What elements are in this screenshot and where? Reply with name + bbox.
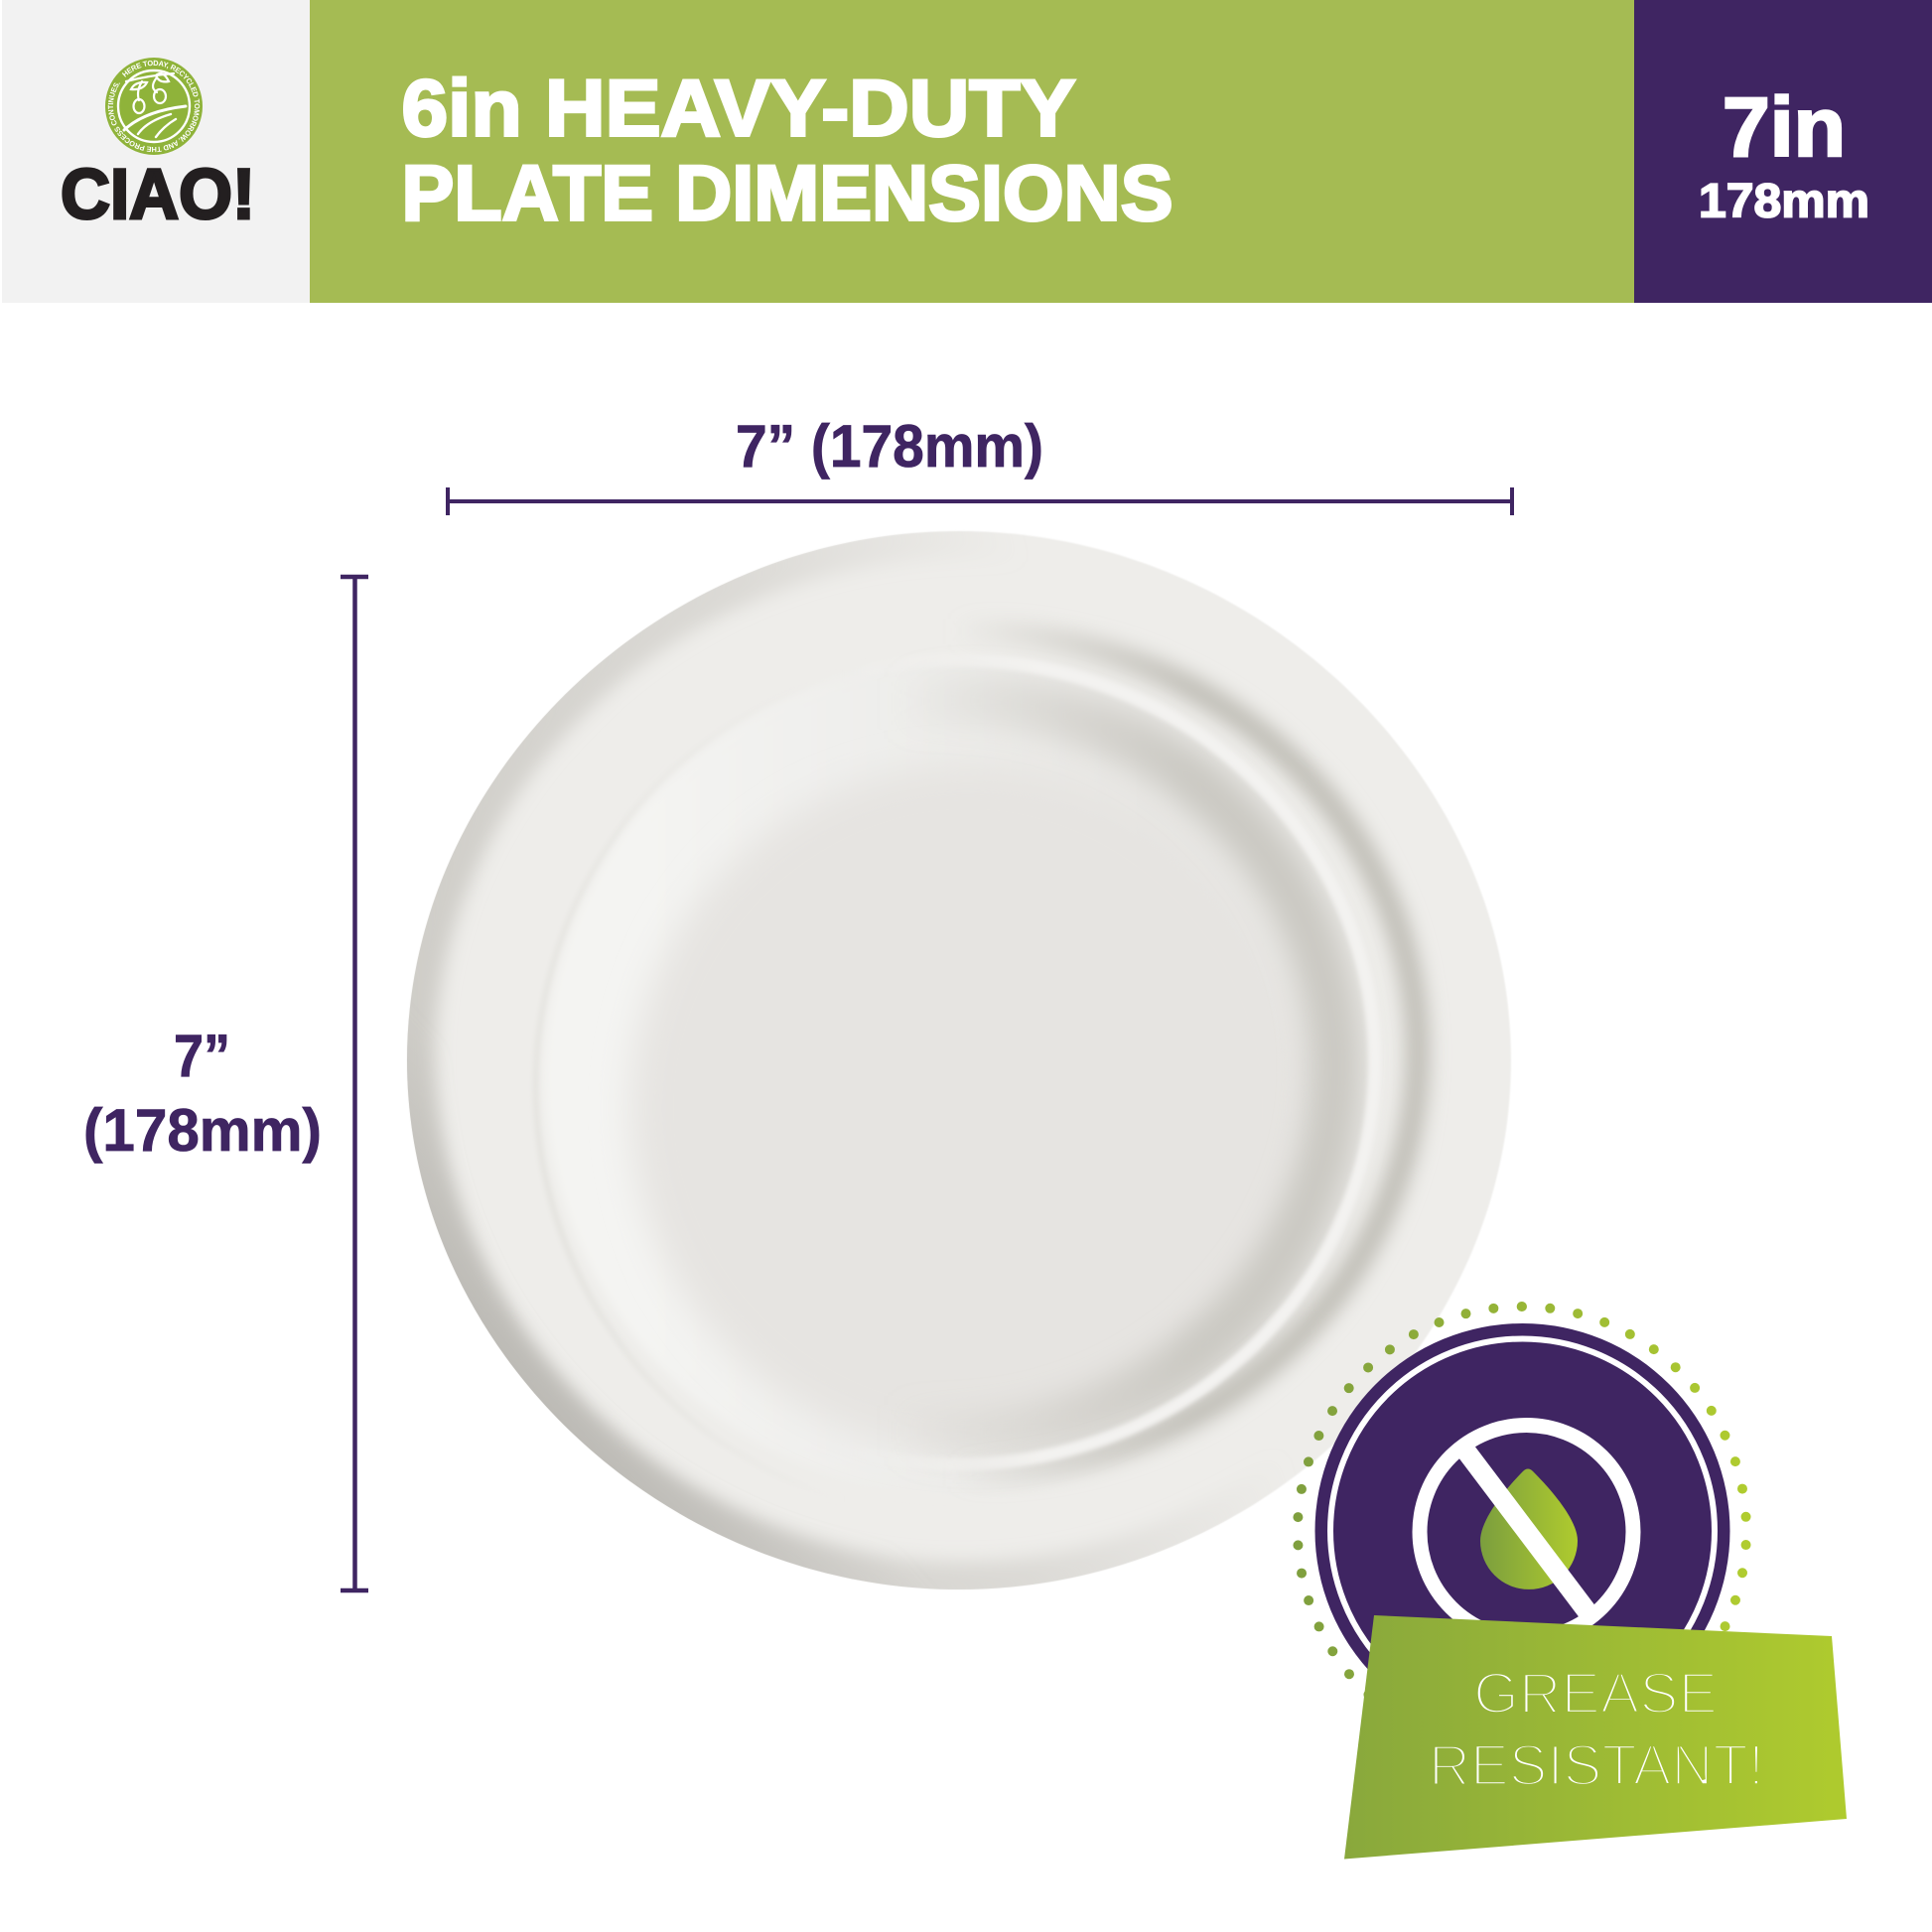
title: PLATE DIMENSIONS	[401, 149, 1173, 236]
header: title band	[310, 0, 1634, 303]
width dimension line	[448, 487, 1512, 515]
header: logo panel	[2, 0, 310, 303]
size in millimetres: 178mm	[1699, 175, 1869, 228]
purple disc	[1314, 1323, 1729, 1738]
size in inches: 7in	[1723, 80, 1846, 174]
badge: grease resistant	[1298, 1307, 1847, 1859]
banner text: RESISTANT!	[1429, 1733, 1764, 1798]
plate	[407, 531, 1511, 1589]
logo wordmark: CIAO!	[61, 156, 255, 234]
logo emblem: HERE TODAY, RECYCLED TOMORROW. AND THE PROCESS CONTINUES.	[107, 60, 201, 153]
header: size panel	[1634, 0, 1932, 303]
dotted ring	[1298, 1307, 1746, 1755]
width label: 7” (178mm)	[736, 413, 1043, 480]
title: 6in HEAVY-DUTY	[401, 64, 1076, 153]
height dimension line	[341, 577, 368, 1590]
banner text: GREASE	[1473, 1662, 1718, 1725]
icon: prohibition sign	[1420, 1426, 1633, 1638]
banner text	[1429, 1662, 1764, 1798]
icon: grease drop	[1480, 1469, 1578, 1589]
height label	[83, 1023, 322, 1164]
banner	[1344, 1615, 1847, 1859]
height label: (178mm)	[83, 1097, 322, 1164]
title	[401, 64, 1173, 236]
height label: 7”	[174, 1023, 230, 1089]
inner white ring	[1330, 1338, 1715, 1724]
